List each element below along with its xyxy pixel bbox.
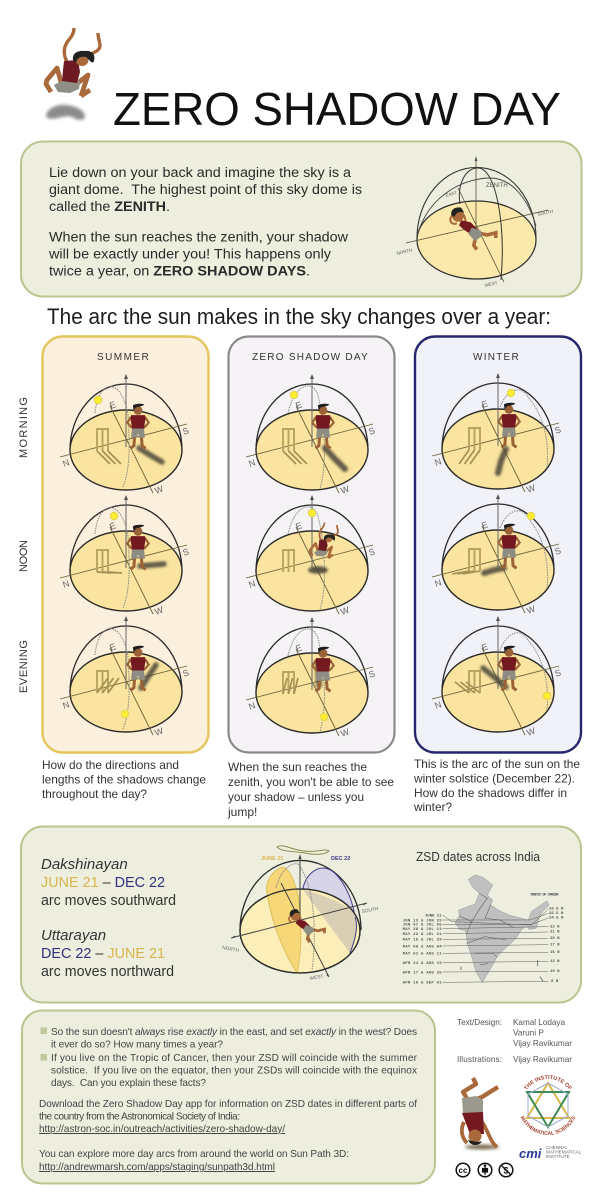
chart: zsd morning <box>246 374 376 496</box>
chart: summer evening <box>60 616 190 738</box>
text block: intro paragraph two <box>48 230 349 280</box>
panel: zenith introduction <box>21 142 582 296</box>
row label: morning: MORNING <box>18 397 30 458</box>
chart: sky dome with zenith: ZENITH <box>486 183 508 189</box>
chart: summer noon <box>60 495 190 617</box>
panel: zero shadow day <box>228 336 394 752</box>
chart: sun arcs through the year: WEST <box>309 974 324 982</box>
chart: summer evening: W <box>153 725 165 738</box>
chart: sun arcs through the year <box>222 846 379 982</box>
chart: india map with zsd dates: MAY 28 & JUL 13 <box>403 928 442 932</box>
chart: zsd evening: W <box>339 726 351 739</box>
chart: summer evening: S <box>181 667 190 679</box>
icon: chennai mathematical institute logo: MATHEMATICAL <box>546 1150 582 1154</box>
text block: uttarayan: Uttarayan <box>41 927 106 944</box>
title: ZERO SHADOW DAY <box>113 83 561 135</box>
chart: india map with zsd dates: 15 N <box>550 951 560 955</box>
chart: winter evening: W <box>525 725 537 738</box>
text block: intro paragraph two: twice a year, on ZERO SHADOW DAYS. <box>49 264 310 280</box>
caption: winter: winter solstice (December 22). <box>413 772 575 786</box>
chart: winter noon: S <box>553 545 562 557</box>
text block: credits: Vijay Ravikumar <box>513 1055 572 1064</box>
caption: zero shadow day: your shadow – unless you <box>228 790 364 804</box>
text block: credits: Text/Design: <box>457 1018 502 1027</box>
chart: summer morning: E <box>108 399 117 411</box>
text block: uttarayan: DEC 22 – JUNE 21 <box>41 945 165 962</box>
text block: question two: days. Can you explain these facts? <box>51 1078 206 1089</box>
panel: dakshinayan and uttarayan <box>21 826 581 1002</box>
text block: dakshinayan <box>41 856 176 909</box>
icon: child doing a handstand <box>462 1078 499 1150</box>
chart: summer noon: W <box>153 604 165 617</box>
text block: dakshinayan: arc moves southward <box>41 892 176 909</box>
row label: noon: NOON <box>18 540 30 572</box>
chart: india map with zsd dates: MAY 08 & AUG 04 <box>403 945 442 949</box>
chart: sun arcs through the year: SOUTH <box>361 906 379 915</box>
chart: summer noon: S <box>181 546 190 558</box>
chart: zsd morning: E <box>294 399 303 411</box>
chart: zsd evening <box>246 617 376 739</box>
chart: india map with zsd dates: JUN 07 & JUL 05 <box>403 924 442 928</box>
chart: summer morning <box>60 374 190 496</box>
chart: india map with zsd dates: MAY 01 & AUG 11 <box>403 953 442 957</box>
text block: question one: So the sun doesn't always rise exactly in the east, and set exactly in the west? Does <box>51 1027 417 1038</box>
text block: sun path link: You can explore more day arcs from around the world on Sun Path 3D: <box>39 1149 349 1160</box>
text block: sun path link <box>39 1149 349 1173</box>
text block: sun path link: http://andrewmarsh.com/apps/staging/sunpath3d.html <box>39 1162 275 1173</box>
chart: india map with zsd dates: MAY 22 & JUL 21 <box>403 933 442 937</box>
text block: intro paragraph one <box>49 165 362 215</box>
icon: creative commons badges: cc <box>459 1166 468 1175</box>
chart: zsd noon: W <box>339 604 351 617</box>
chart: winter morning: S <box>553 424 562 436</box>
icon: institute of mathematical sciences logo <box>520 1075 575 1135</box>
chart: zsd evening: E <box>294 642 303 654</box>
chart: summer evening: N <box>61 699 71 711</box>
chart: india map with zsd dates: APR 10 & SEP 01 <box>403 982 442 986</box>
heading: summer: SUMMER <box>97 352 149 363</box>
icon: chennai mathematical institute logo <box>519 1145 582 1161</box>
heading: zsd dates: ZSD dates across India <box>416 849 541 864</box>
text block: question one <box>51 1027 417 1050</box>
chart: india map with zsd dates: 12 N <box>550 960 560 964</box>
chart: india map with zsd dates: 10 N <box>550 970 560 974</box>
caption: summer: How do the directions and <box>42 758 179 772</box>
chart: zsd morning: S <box>367 425 376 437</box>
chart: summer noon: E <box>108 520 117 532</box>
chart: winter morning: N <box>433 456 443 468</box>
icon: institute of mathematical sciences logo: THE INSTITUTE OF <box>524 1075 572 1090</box>
chart: winter noon: N <box>433 577 443 589</box>
text block: question two: If you live on the Tropic of Cancer, then your ZSD will coincide with the summer <box>51 1053 418 1064</box>
caption: zero shadow day: jump! <box>227 805 257 819</box>
chart: india map with zsd dates: 8 N <box>551 980 559 984</box>
text block: app download: the country from the Astronomical Society of India: <box>39 1112 240 1122</box>
caption: winter <box>413 757 580 814</box>
chart: india map with zsd dates: APR 24 & AUG 19 <box>403 962 442 966</box>
chart: winter noon: W <box>525 603 537 616</box>
chart: india map with zsd dates: APR 17 & AUG 25 <box>403 971 442 975</box>
chart: india map with zsd dates: MAY 15 & JUL 29 <box>403 939 442 943</box>
icon: creative commons badges <box>456 1163 513 1177</box>
icon: chennai mathematical institute logo: INSTITUTE <box>546 1154 570 1159</box>
chart: winter evening: N <box>433 699 443 711</box>
caption: winter: How do the shadows differ in <box>414 786 567 800</box>
chart: winter noon <box>432 494 562 616</box>
text block: credits: Varuni P <box>513 1028 544 1038</box>
chart: india map with zsd dates: JUNE 21 <box>425 914 442 918</box>
chart: india map with zsd dates: 26.5 N <box>549 908 564 912</box>
icon: institute of mathematical sciences logo: MATHEMATICAL SCIENCES <box>520 1116 575 1135</box>
text block: question one: it ever do so? How many times a year? <box>51 1040 223 1050</box>
caption: winter: This is the arc of the sun on the <box>414 757 580 771</box>
chart: india map with zsd dates: 17 N <box>550 943 560 947</box>
text block: intro paragraph one: Lie down on your back and imagine the sky is a <box>49 165 351 181</box>
chart: winter evening <box>432 616 562 738</box>
caption: zero shadow day: zenith, you won't be able to see <box>228 775 394 789</box>
text block: question two: solstice. If you live on the equator, then your ZSDs will coincide with the equinox <box>51 1066 417 1076</box>
chart: sky dome with zenith: EAST <box>445 190 458 198</box>
heading: zero shadow day: ZERO SHADOW DAY <box>252 352 368 363</box>
text block: dakshinayan: JUNE 21 – DEC 22 <box>41 874 165 891</box>
heading: winter: WINTER <box>473 352 519 363</box>
chart: zsd noon: E <box>294 520 303 532</box>
text block: intro paragraph two: When the sun reaches the zenith, your shadow <box>49 230 349 246</box>
icon: bullet <box>40 1054 47 1060</box>
chart: zsd noon <box>246 495 376 617</box>
chart: india map with zsd dates: TROPIC OF CANCER <box>530 893 559 897</box>
chart: zsd morning: N <box>247 457 257 469</box>
panel: further questions and links <box>22 1010 435 1184</box>
text block: intro paragraph one: called the ZENITH. <box>49 199 170 215</box>
chart: winter noon: E <box>480 519 489 531</box>
icon: jumping child <box>46 28 100 120</box>
chart: winter morning: W <box>525 482 537 495</box>
chart: sun arcs through the year: JUNE 21 <box>261 856 283 862</box>
text block: credits <box>457 1018 572 1064</box>
chart: sky dome with zenith: SOUTH <box>537 209 554 217</box>
text block: credits: Vijay Ravikumar <box>513 1039 572 1048</box>
chart: winter evening: E <box>480 641 489 653</box>
chart: india map with zsd dates: 22 N <box>550 925 560 929</box>
chart: india map with zsd dates: 25.5 N <box>549 912 564 916</box>
text block: app download <box>39 1099 417 1135</box>
text block: intro paragraph one: giant dome. The highest point of this sky dome is <box>49 182 362 198</box>
text block: uttarayan: arc moves northward <box>41 963 174 980</box>
chart: sun arcs through the year: DEC 22 <box>331 856 350 862</box>
chart: zsd evening: S <box>367 668 376 680</box>
text block: uttarayan <box>41 927 174 980</box>
icon: bullet <box>40 1028 47 1034</box>
chart: zsd noon: S <box>367 546 376 558</box>
chart: sun arcs through the year: NORTH <box>222 945 240 954</box>
chart: winter morning <box>432 373 562 495</box>
chart: summer morning: S <box>181 425 190 437</box>
icon: chennai mathematical institute logo: CHENNAI <box>546 1145 567 1150</box>
caption: zero shadow day: When the sun reaches the <box>228 760 367 774</box>
chart: india map with zsd dates: JUN 13 & JUN 29 <box>403 919 442 923</box>
caption: zero shadow day <box>227 760 394 819</box>
text block: question two <box>51 1053 418 1089</box>
chart: zsd noon: N <box>247 578 257 590</box>
caption: winter: winter? <box>413 800 452 814</box>
heading: arc over a year: The arc the sun makes in the sky changes over a year: <box>47 304 551 329</box>
caption: summer <box>42 758 206 801</box>
chart: india map with zsd dates <box>403 875 564 986</box>
chart: sky dome with zenith <box>396 156 554 288</box>
chart: winter morning: E <box>480 398 489 410</box>
chart: india map with zsd dates: 20 N <box>550 937 560 941</box>
chart: sky dome with zenith: NORTH <box>396 248 413 256</box>
chart: summer morning: W <box>153 483 165 496</box>
chart: india map with zsd dates: 21 N <box>550 931 560 935</box>
chart: summer noon: N <box>61 578 71 590</box>
chart: sky dome with zenith: WEST <box>484 280 498 288</box>
icon: chennai mathematical institute logo: cmi <box>519 1146 542 1161</box>
icon: creative commons badges: $ <box>503 1166 509 1176</box>
chart: zsd morning: W <box>339 483 351 496</box>
panel: summer <box>42 336 208 752</box>
caption: summer: throughout the day? <box>42 787 147 801</box>
row label: evening: EVENING <box>18 640 30 693</box>
panel: winter <box>415 336 581 752</box>
icon: jump shadow <box>46 105 85 120</box>
text block: credits: Illustrations: <box>457 1055 502 1064</box>
caption: summer: lengths of the shadows change <box>42 772 206 786</box>
chart: india map with zsd dates: 24.5 N <box>549 917 564 921</box>
chart element: analemma <box>277 846 329 854</box>
text block: credits: Kamal Lodaya <box>513 1018 565 1027</box>
text block: app download: http://astron-soc.in/outreach/activities/zero-shadow-day/ <box>39 1124 285 1135</box>
chart: winter evening: S <box>553 667 562 679</box>
chart: summer evening: E <box>108 641 117 653</box>
text block: intro paragraph two: will be exactly under you! This happens only <box>48 246 332 262</box>
text block: app download: Download the Zero Shadow Day app for information on ZSD dates in different parts of <box>39 1099 417 1110</box>
text block: dakshinayan: Dakshinayan <box>41 856 128 873</box>
chart: summer morning: N <box>61 457 71 469</box>
chart: zsd evening: N <box>247 700 257 712</box>
